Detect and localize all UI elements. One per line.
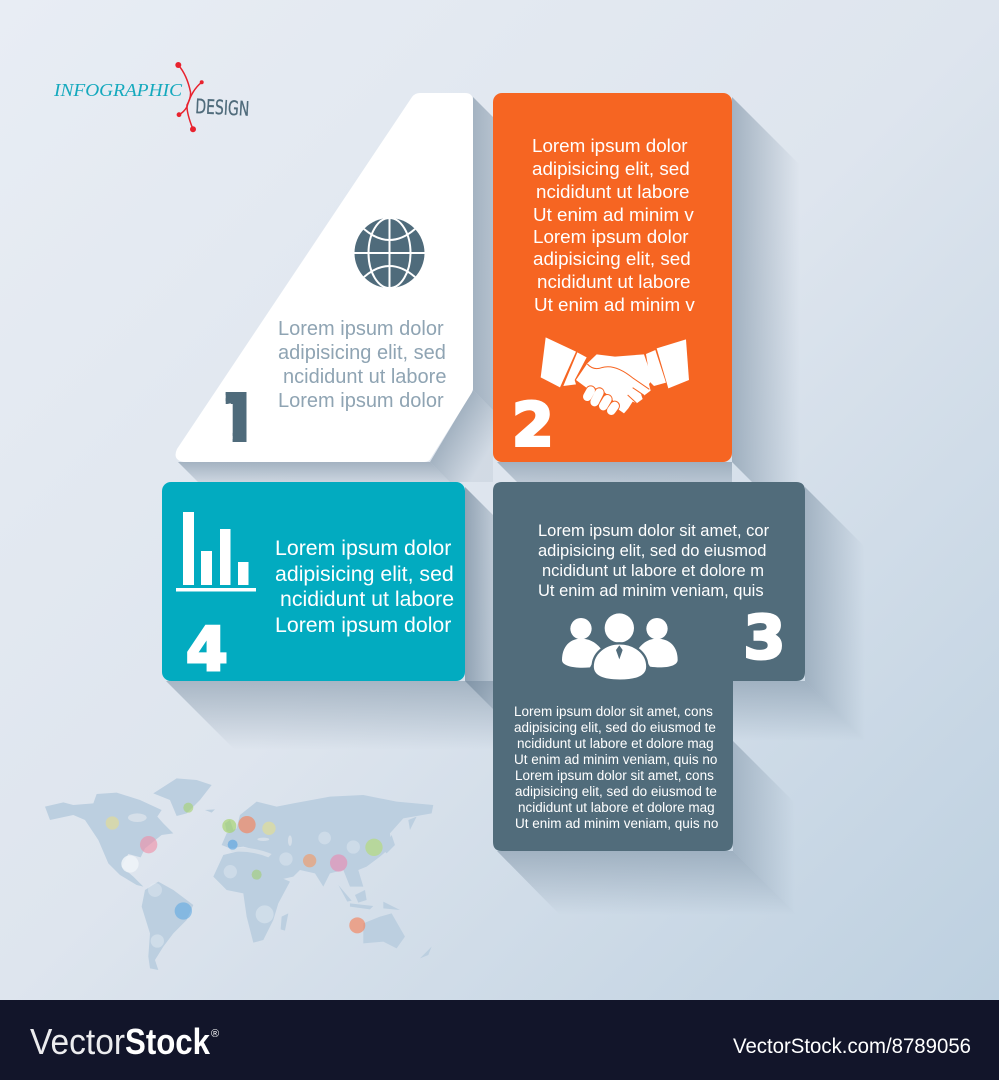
panel 1 text — [278, 318, 446, 412]
panel 1 text: Lorem ipsum dolor — [278, 318, 444, 340]
panel 3 lower text: adipisicing elit, sed do eiusmod te — [514, 720, 716, 735]
footer bar: ® — [211, 1028, 219, 1040]
panel 2: orange — [493, 93, 732, 462]
panel 1 text: adipisicing elit, sed — [278, 342, 446, 364]
panel 4 text: Lorem ipsum dolor — [275, 613, 451, 637]
panel 1 text: ncididunt ut labore — [283, 366, 446, 388]
footer logo: Vector — [30, 1021, 125, 1062]
panel 4 shape — [162, 482, 465, 681]
logo — [53, 62, 250, 132]
panel 3 lower text: adipisicing elit, sed do eiusmod te — [515, 784, 717, 799]
panel 3 lower text: ncididunt ut labore et dolore mag — [517, 736, 714, 751]
panel 3 upper text: Lorem ipsum dolor sit amet, cor — [538, 522, 770, 540]
number 1: 1 — [214, 377, 263, 459]
panel 2 text — [532, 135, 695, 315]
panel 3: slate — [493, 482, 805, 851]
panel 3 upper text: ncididunt ut labore et dolore m — [542, 562, 764, 580]
bays and inland seas — [128, 813, 292, 857]
long shadows — [166, 97, 865, 915]
panel 3 upper text: Ut enim ad minim veniam, quis — [538, 582, 764, 600]
panel 3 lower text: Lorem ipsum dolor sit amet, cons — [514, 704, 713, 719]
panel 2 text: ncididunt ut labore — [537, 271, 690, 292]
panel 2 text: Lorem ipsum dolor — [533, 226, 689, 247]
panel 1: white — [176, 93, 473, 462]
panel 1 text: Lorem ipsum dolor — [278, 390, 444, 412]
panel 2 text: adipisicing elit, sed — [533, 248, 691, 269]
continents — [45, 778, 433, 970]
panel 3 lower text: Ut enim ad minim veniam, quis no — [515, 816, 718, 831]
icon: globe — [354, 218, 425, 288]
map bubbles — [106, 803, 383, 948]
footer bar: Stock — [125, 1021, 211, 1062]
panel 4: teal — [162, 482, 465, 685]
icon: people — [562, 613, 678, 681]
panel 3 lower text: Lorem ipsum dolor sit amet, cons — [515, 768, 714, 783]
panel 2 shape — [493, 93, 732, 462]
footer bar — [0, 1000, 999, 1080]
panel 2 text: adipisicing elit, sed — [532, 158, 690, 179]
panel 2 text: ncididunt ut labore — [536, 181, 690, 202]
panel 3 upper text: adipisicing elit, sed do eiusmod — [538, 542, 766, 560]
logo text: design: DESIGN — [195, 94, 250, 121]
icon: handshake — [541, 337, 689, 413]
panel 4 text: Lorem ipsum dolor — [275, 536, 451, 560]
logo mark: red X curves — [175, 62, 204, 132]
panel 3 lower text: ncididunt ut labore et dolore mag — [518, 800, 715, 815]
panel 2 text: Lorem ipsum dolor — [532, 135, 688, 156]
panel 3 upper text — [538, 522, 770, 600]
panel 4 text: adipisicing elit, sed — [275, 562, 454, 586]
panel 1 shape — [176, 93, 473, 462]
panel 3 shape — [493, 482, 805, 851]
panel 3 lower text: Ut enim ad minim veniam, quis no — [514, 752, 717, 767]
world map — [45, 778, 433, 970]
panel 2 text: Ut enim ad minim v — [534, 294, 695, 315]
number 2: 2 — [512, 390, 554, 460]
panel 4 text: ncididunt ut labore — [280, 587, 454, 611]
panel 2 text: Ut enim ad minim v — [533, 204, 694, 225]
number 4: 4 — [186, 615, 228, 685]
footer url: VectorStock.com/8789056 — [733, 1035, 971, 1058]
panel 4 text — [275, 536, 454, 637]
panel 3 lower text — [514, 704, 718, 831]
icon: bar chart — [176, 512, 256, 592]
number 3: 3 — [744, 603, 785, 673]
logo text: infographic: INFOGRAPHIC — [53, 80, 182, 100]
